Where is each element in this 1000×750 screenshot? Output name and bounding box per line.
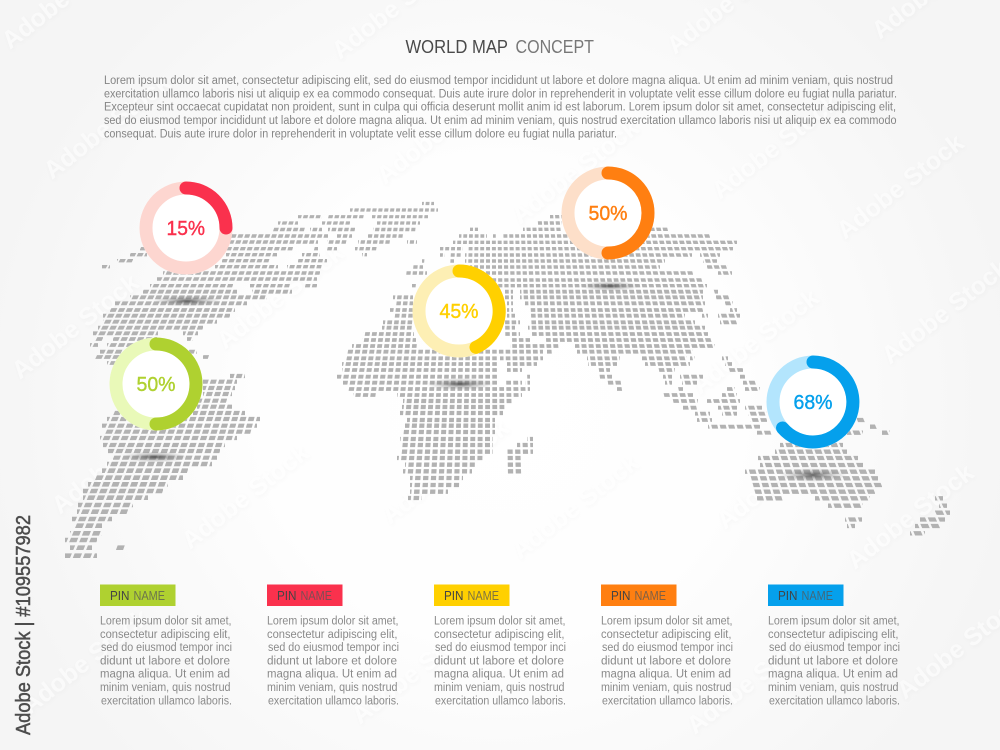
legend column: blue: NAME [802, 589, 833, 603]
legend column: green: didunt ut labore et dolore [100, 655, 230, 667]
legend column: red: sed do eiusmod tempor inci [268, 642, 399, 654]
donut: 68% blue: 68% [794, 391, 832, 414]
watermark pattern: Adobe Stock [6, 269, 144, 385]
watermark pattern: Adobe Stock [506, 449, 644, 565]
legend column: red: didunt ut labore et dolore [267, 655, 397, 667]
watermark pattern: Adobe Stock [686, 284, 824, 400]
legend column: yellow: sed do eiusmod tempor inci [435, 642, 566, 654]
legend column: yellow: didunt ut labore et dolore [434, 655, 564, 667]
pin shadows [122, 281, 847, 482]
intro paragraph: Lorem ipsum dolor sit amet, consectetur adipiscing elit, sed do eiusmod tempor incididunt ut labore et dolore magna aliqua. Ut enim ad minim veniam, quis nostrud [104, 75, 893, 87]
legend column: orange: PIN [611, 589, 630, 603]
donut: 50% orange [562, 166, 654, 260]
map: South America [65, 376, 260, 556]
intro paragraph: exercitation ullamco laboris nisi ut aliquip ex ea commodo consequat. Duis aute irure dolor in reprehenderit in voluptate velit esse cillum dolore eu fugiat nulla pariatur. [104, 88, 897, 100]
legend column: blue: Lorem ipsum dolor sit amet, [768, 616, 900, 628]
title [406, 37, 594, 57]
legend column: blue [768, 584, 900, 707]
legend column: orange: didunt ut labore et dolore [601, 655, 731, 667]
intro paragraph: consequat. Duis aute irure dolor in reprehenderit in voluptate velit esse cillum dolore eu fugiat nulla pariatur. [104, 128, 617, 140]
watermark pattern: Adobe Stock [841, 459, 979, 575]
legend column: red: NAME [300, 589, 332, 603]
legend column: blue: minim veniam, quis nostrud [768, 682, 898, 694]
watermark pattern: Adobe Stock [376, 414, 514, 530]
legend column: blue: magna aliqua. Ut enim ad [768, 669, 898, 681]
donut: 50% green [110, 338, 202, 430]
legend column: green [100, 584, 232, 707]
donut: 15% red: 15% [166, 217, 205, 240]
legend column: yellow: consectetur adipiscing elit, [434, 629, 564, 641]
legend column: green: Lorem ipsum dolor sit amet, [100, 616, 232, 628]
legend column: yellow: Lorem ipsum dolor sit amet, [434, 616, 566, 628]
intro paragraph: Excepteur sint occaecat cupidatat non proident, sunt in culpa qui officia deserunt mollit anim id est laborum. Lorem ipsum dolor sit amet, consectetur adipiscing elit, [104, 102, 896, 114]
legend column: blue: didunt ut labore et dolore [768, 655, 898, 667]
legend column: orange: Lorem ipsum dolor sit amet, [601, 616, 732, 628]
legend column: green: exercitation ullamco laboris. [101, 695, 232, 707]
watermark pattern: Adobe Stock [711, 419, 849, 535]
map: Eurasia and Africa [337, 217, 772, 498]
watermark pattern: Adobe Stock [831, 129, 969, 245]
intro paragraph [104, 75, 897, 140]
legend column: orange: NAME [634, 589, 666, 603]
legend column: yellow: NAME [468, 589, 499, 603]
legend column: green: minim veniam, quis nostrud [100, 682, 230, 694]
legend column: red: consectetur adipiscing elit, [267, 629, 398, 641]
legend column: yellow: minim veniam, quis nostrud [434, 682, 564, 694]
intro paragraph: sed do eiusmod tempor incididunt ut labore et dolore magna aliqua. Ut enim ad minim veniam, quis nostrud exercitation ullamco laboris nisi ut aliquip ex ea commodo [104, 115, 896, 127]
legend column: orange [601, 584, 733, 707]
donut: 50% green: 50% [136, 373, 176, 396]
donut: 45% yellow: 45% [440, 300, 478, 323]
legend column: yellow: PIN [444, 589, 464, 603]
dotted world map [65, 204, 950, 556]
watermark pattern: Adobe Stock [211, 239, 349, 355]
legend column: blue: consectetur adipiscing elit, [768, 629, 898, 641]
legend column: red: minim veniam, quis nostrud [267, 682, 398, 694]
legend column: green: PIN [110, 589, 130, 603]
watermark pattern: Adobe Stock [346, 614, 484, 730]
watermark pattern: Adobe Stock [46, 404, 184, 520]
legend column: blue: sed do eiusmod tempor inci [769, 642, 900, 654]
map: North America [90, 204, 438, 363]
title: CONCEPT [516, 37, 594, 57]
legend column: red: magna aliqua. Ut enim ad [267, 669, 397, 681]
legend column: green: sed do eiusmod tempor inci [101, 642, 232, 654]
legend column: green: magna aliqua. Ut enim ad [100, 669, 230, 681]
legend column: orange: minim veniam, quis nostrud [601, 682, 732, 694]
watermark pattern: Adobe Stock [371, 74, 509, 190]
legend column: orange: consectetur adipiscing elit, [601, 629, 732, 641]
legend column: blue: PIN [778, 589, 798, 603]
donut: 50% orange: 50% [588, 202, 628, 225]
legend column: blue: exercitation ullamco laboris. [769, 695, 900, 707]
watermark pattern: Adobe Stock [16, 604, 154, 720]
legend column: red: exercitation ullamco laboris. [268, 695, 399, 707]
legend column: yellow [434, 584, 566, 707]
donut: 15% red [140, 182, 232, 274]
title: WORLD MAP [406, 37, 508, 57]
donut: 68% blue [766, 356, 860, 448]
legend column: yellow: magna aliqua. Ut enim ad [434, 669, 564, 681]
map: Australia and islands [745, 420, 950, 533]
legend column: green: consectetur adipiscing elit, [100, 629, 230, 641]
watermark pattern: Adobe Stock [506, 114, 644, 230]
legend column: yellow: exercitation ullamco laboris. [435, 695, 566, 707]
watermark pattern: Adobe Stock [176, 439, 314, 555]
watermark pattern: Adobe Stock [38, 69, 176, 185]
legend column: red: Lorem ipsum dolor sit amet, [267, 616, 398, 628]
legend column: orange: exercitation ullamco laboris. [602, 695, 733, 707]
watermark pattern: Adobe Stock [706, 89, 844, 205]
legend column: orange: sed do eiusmod tempor inci [602, 642, 733, 654]
donut: 45% yellow [412, 264, 506, 358]
legend column: green: NAME [134, 589, 165, 603]
legend column: red [267, 584, 399, 707]
legend column: red: PIN [277, 589, 296, 603]
stock id vertical label: Adobe Stock | #109557982 [13, 515, 35, 735]
legend column: orange: magna aliqua. Ut enim ad [601, 669, 731, 681]
watermark pattern: Adobe Stock [681, 624, 819, 740]
